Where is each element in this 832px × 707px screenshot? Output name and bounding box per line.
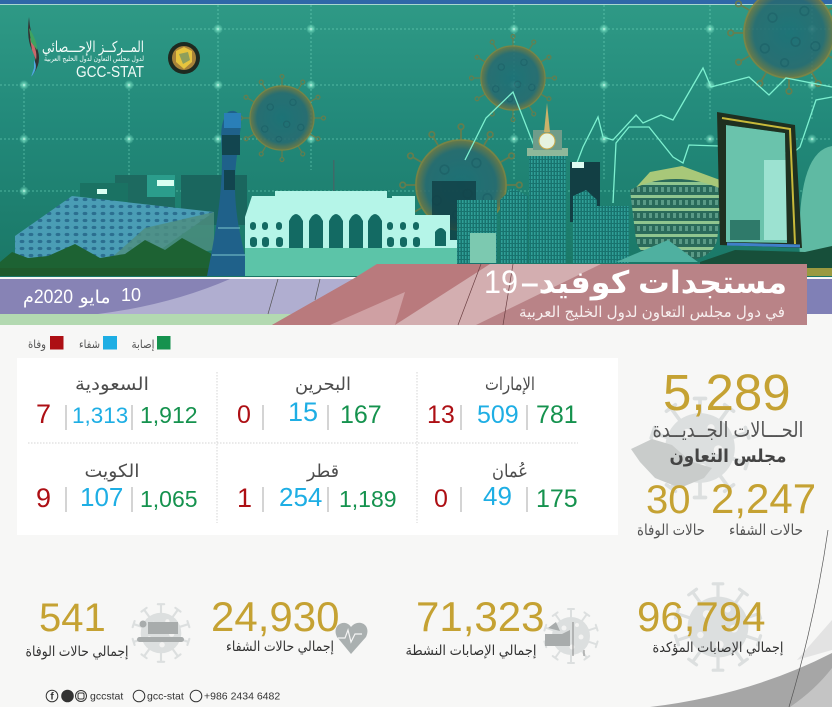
panel: country table: [17, 358, 618, 535]
country: Saudi Arabia: السعودية: [75, 374, 149, 395]
building: round tower: [616, 166, 724, 262]
building: Royal Opera House Muscat: [245, 160, 460, 276]
building: Kuwait cultural centre: [0, 196, 240, 276]
country: Kuwait: 107: [80, 482, 123, 512]
country: Kuwait: 1,065: [140, 486, 198, 512]
panel: new cases GCC: [631, 364, 816, 539]
country: Oman: [434, 461, 578, 513]
heading: subtitle: في دول مجلس التعاون لدول الخليج العربية: [519, 304, 785, 322]
country: Saudi Arabia: 1,313: [72, 403, 128, 428]
stat: total recovered: إجمالي حالات الشفاء: [226, 638, 334, 655]
country: Saudi Arabia: 7: [36, 399, 51, 429]
footer: social contacts: f: [50, 692, 54, 702]
logo: GCC-STAT: [28, 17, 144, 81]
logo: GCC-STAT: لدول مجلس التعاون لدول الخليج العربية: [44, 56, 144, 63]
recoveries number: 2,247: [711, 475, 816, 522]
country: UAE: الإمارات: [485, 374, 535, 394]
stat: total active: 71,323: [416, 593, 544, 640]
deaths label: حالات الوفاة: [637, 522, 705, 539]
country: Kuwait: 9: [36, 483, 51, 513]
country: Bahrain: 167: [340, 401, 382, 429]
logo: GCC-STAT: المــركــز الإحـــصائي: [42, 39, 144, 57]
country: Oman: 0: [434, 485, 448, 513]
country: Qatar: 254: [279, 482, 322, 512]
new cases label: الحـــالات الجــديــدة: [652, 419, 804, 442]
legend: وفاة: [28, 339, 46, 352]
stat: total deaths: 541: [39, 596, 106, 640]
footer: social contacts: gccstat: [90, 690, 123, 702]
footer: social contacts: [46, 690, 280, 702]
stat: total recovered: [211, 593, 367, 655]
country: Bahrain: 15: [288, 397, 318, 427]
date text: [23, 285, 141, 308]
heading: title: مستجدات كوفيد–: [521, 265, 787, 301]
footer: social contacts: gcc-stat: [147, 690, 184, 702]
new cases number: 5,289: [663, 364, 791, 421]
banner: skyline illustration: [0, 0, 832, 277]
date text: 10: [121, 285, 141, 305]
footer: social contacts: +986 2434 6482: [204, 690, 280, 702]
recoveries label: حالات الشفاء: [729, 522, 803, 539]
country: Qatar: 1: [237, 483, 252, 513]
stat: total active: إجمالي الإصابات النشطة: [406, 642, 537, 659]
stat: total confirmed: [637, 584, 784, 670]
country: Oman: 49: [483, 481, 512, 511]
stat: total deaths: [26, 596, 189, 662]
stat: total recovered: 24,930: [211, 593, 339, 640]
date text: 2020م: [23, 287, 73, 308]
country: Qatar: قطر: [306, 461, 339, 482]
country: Saudi Arabia: 1,912: [140, 402, 198, 428]
country: Bahrain: [237, 374, 382, 429]
panel: title ribbon: [272, 264, 807, 325]
stat: total active: [406, 593, 598, 663]
legend: [28, 336, 170, 352]
country: UAE: 509: [477, 401, 519, 429]
country: Saudi Arabia: [36, 374, 198, 429]
decorative corner swoosh: [650, 530, 832, 707]
stat: total confirmed: 96,794: [637, 593, 765, 640]
band: date ribbon: [0, 279, 832, 325]
deaths number: 30: [646, 478, 690, 522]
country: Kuwait: الكويت: [84, 461, 140, 482]
country: UAE: 13: [427, 401, 455, 429]
country: Oman: عُمان: [492, 461, 528, 481]
country: UAE: [427, 374, 578, 429]
legend: إصابة: [132, 339, 154, 351]
icon: GCC emblem: [168, 42, 200, 74]
country: Qatar: 1,189: [339, 486, 397, 512]
country: Bahrain: 0: [237, 401, 251, 429]
country: Bahrain: البحرين: [295, 374, 351, 395]
country: UAE: 781: [536, 401, 578, 429]
building: Dubai frame: [700, 112, 832, 276]
country: Qatar: [237, 461, 397, 513]
building: Makkah clock tower group: [457, 103, 629, 264]
logo: GCC-STAT: GCC-STAT: [76, 64, 144, 81]
icon: virus and gulf map watermark: [631, 398, 749, 498]
heading: title: 19: [484, 264, 518, 300]
building: Aspire tower: [207, 111, 250, 276]
stat: total confirmed: إجمالي الإصابات المؤكدة: [652, 639, 784, 656]
GCC label: مجلس التعاون: [670, 446, 786, 467]
stat: total deaths: إجمالي حالات الوفاة: [26, 643, 129, 660]
legend: شفاء: [79, 339, 100, 351]
date text: مايو: [78, 287, 110, 308]
country: Kuwait: [36, 461, 198, 513]
country: Oman: 175: [536, 485, 578, 513]
